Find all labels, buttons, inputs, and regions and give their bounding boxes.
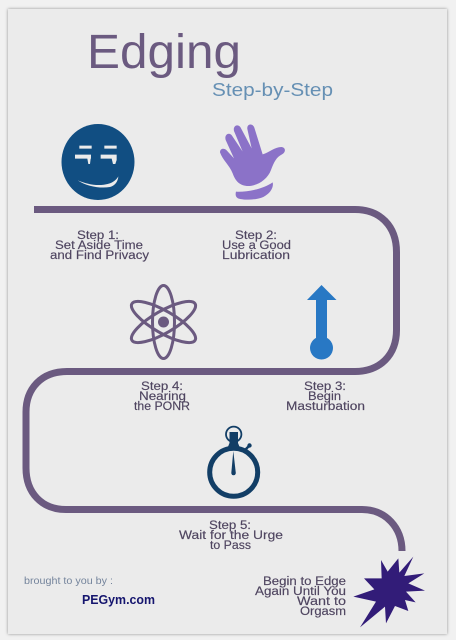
icon: hand [220,125,285,200]
step 1 label: Set Aside Time [55,240,143,252]
step 3 label: Step 3: [304,381,346,393]
icon: smirking face [62,124,134,200]
title: Edging [87,26,241,79]
step 5 label: to Pass [210,540,251,552]
step 4 label: Nearing [139,391,186,403]
final step label: Again Until You [255,586,346,598]
step 4 label: the PONR [134,401,190,413]
icon: stopwatch [210,427,258,496]
step 1 label [50,230,149,262]
final step label: Begin to Edge [263,576,346,588]
step 2 label: Use a Good [222,240,291,252]
subtitle: Step-by-Step [212,80,333,100]
step 3 label [286,381,365,413]
icon: up arrow [307,285,336,360]
credit text: brought to you by : [24,576,113,587]
step 2 label: Lubrication [222,250,290,262]
icon: starburst [353,557,425,627]
step 4 label [134,381,190,413]
winding path [26,210,402,551]
final step label [255,576,346,618]
step 4 label: Step 4: [141,381,183,393]
step 5 label: Step 5: [209,520,251,532]
step 1 label: and Find Privacy [50,250,149,262]
credit link: PEGym.com [82,593,155,607]
final step label: Want to [297,596,346,608]
step 5 label: Wait for the Urge [179,530,283,542]
final step label: Orgasm [300,606,346,618]
step 5 label [179,520,283,552]
step 2 label: Step 2: [235,230,277,242]
step 1 label: Step 1: [77,230,119,242]
icon: atom [126,286,201,358]
step 2 label [222,230,291,262]
step 3 label: Masturbation [286,401,365,413]
step 3 label: Begin [308,391,341,403]
